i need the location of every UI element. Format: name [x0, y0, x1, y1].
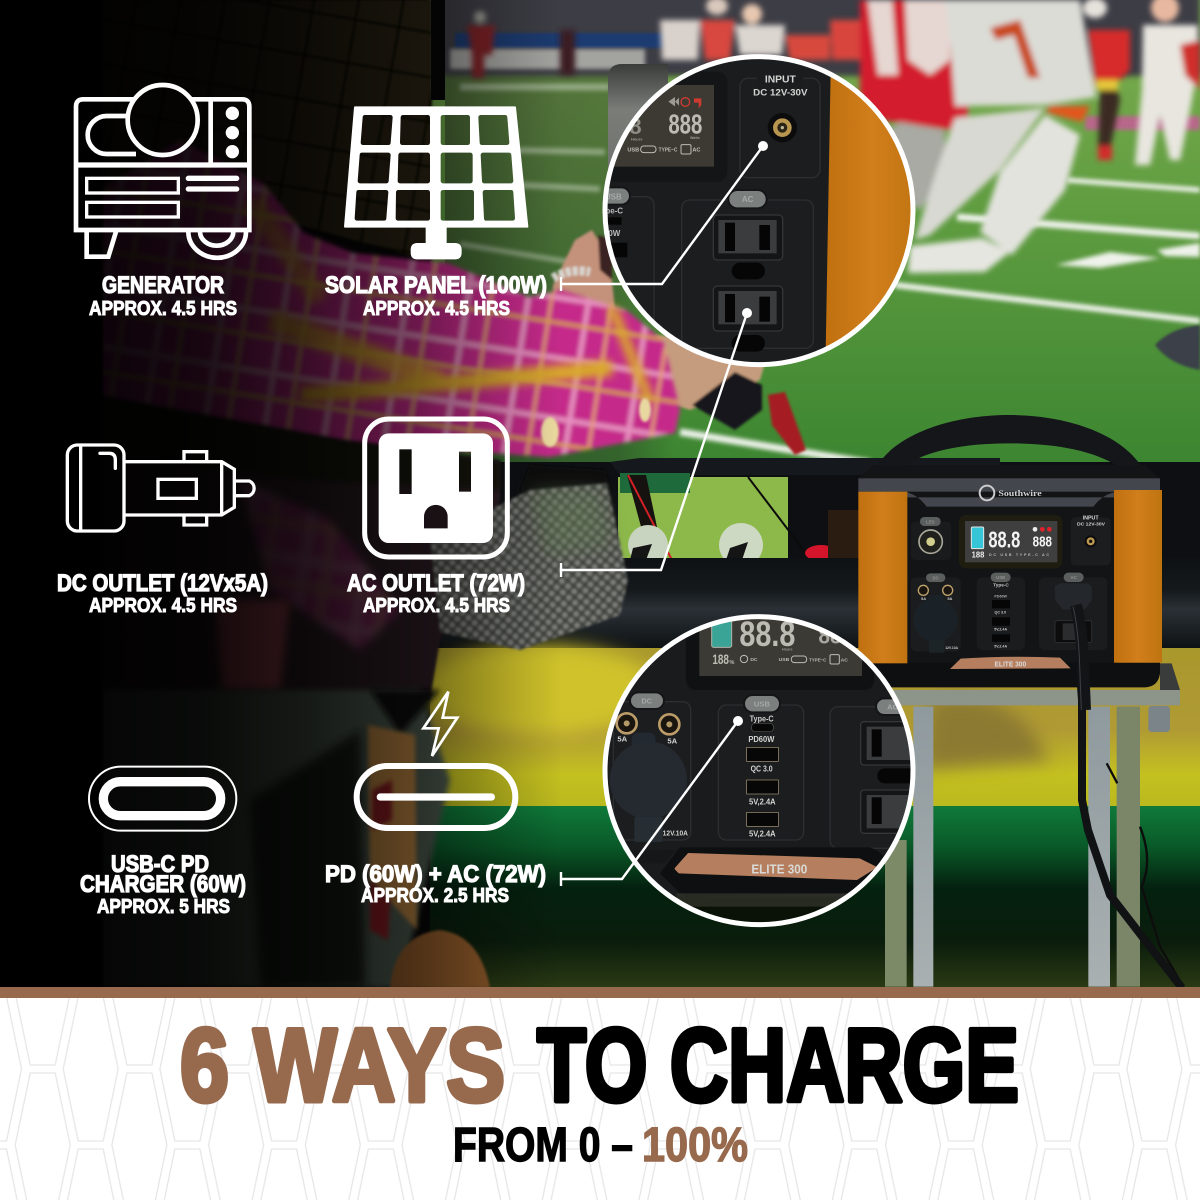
LCD display: 888 — [1033, 534, 1052, 550]
input port module: INPUT — [1083, 515, 1099, 521]
icon: generator — [76, 85, 249, 258]
distant players — [467, 0, 1200, 165]
input port close-up: INPUT — [765, 75, 797, 86]
USB ports close-up: pe-C — [605, 206, 623, 215]
logo: Southwire — [998, 489, 1042, 498]
carry handle — [877, 415, 1142, 467]
DC outlet module: 5A — [921, 596, 926, 601]
label: PD + AC: APPROX. 2.5 HRS — [361, 885, 509, 907]
AC outlets close-up — [682, 190, 813, 352]
portable power station: Southwire Elite 300 — [858, 415, 1162, 710]
label: generator — [89, 272, 237, 320]
LCD display close-up: USB — [627, 147, 639, 153]
LCD display close-up — [686, 619, 874, 690]
LCD display close-up: % — [729, 660, 734, 666]
tailgate pole — [431, 0, 445, 100]
label: DC outlet: DC OUTLET (12Vx5A) — [57, 570, 268, 597]
title: TO CHARGE — [537, 1008, 1019, 1124]
LCD display close-up: 8 — [629, 114, 642, 139]
input port module — [1071, 515, 1111, 565]
bottom housing and lawn — [660, 847, 884, 922]
connector line: PD + AC — [561, 716, 743, 886]
LCD display close-up: TYPE−C — [659, 147, 677, 153]
LCD display close-up: USB — [779, 657, 790, 663]
LCD display close-up: AC — [841, 657, 848, 663]
label: solar panel: APPROX. 4.5 HRS — [363, 298, 510, 320]
blurred football players — [467, 0, 1200, 273]
LCD display close-up: 188 — [712, 651, 729, 667]
orange side panels — [858, 492, 907, 663]
label: PD + AC: PD (60W) + AC (72W) — [325, 861, 546, 888]
logo — [980, 486, 1042, 500]
person: plaid upper — [256, 0, 434, 262]
USB ports close-up: 5V,2.4A — [749, 797, 776, 806]
USB module: 5V,2.4A — [994, 628, 1007, 632]
LCD display close-up: DC — [750, 657, 758, 663]
label: generator: APPROX. 4.5 HRS — [89, 298, 237, 320]
label: generator: GENERATOR — [102, 272, 224, 299]
title — [180, 1008, 1019, 1124]
ELITE 300 nameplate — [950, 657, 1071, 669]
dark equipment at field edge — [1155, 325, 1200, 370]
LCD display close-up: 88.8 — [739, 615, 795, 654]
LCD display: 88.8 — [988, 526, 1020, 552]
player number 7 — [945, 0, 1096, 106]
label: USB-C PD charger: APPROX. 5 HRS — [97, 896, 230, 918]
footer band — [0, 987, 1200, 1200]
label: DC outlet: APPROX. 4.5 HRS — [89, 595, 237, 617]
label: solar panel — [325, 272, 547, 320]
LCD display close-up: 88 — [818, 622, 842, 648]
title: 6 WAYS — [180, 1008, 505, 1124]
label: DC outlet — [57, 570, 268, 617]
subtitle: 100% — [642, 1119, 748, 1172]
label: PD + AC — [325, 861, 546, 907]
DC ports close-up: DC — [641, 697, 653, 706]
person: lower shirt and trousers — [100, 395, 500, 988]
magnified callout: USB and DC ports — [602, 614, 916, 928]
orange side panel — [826, 77, 910, 347]
input port close-up — [740, 75, 820, 178]
person: hand and forearm — [553, 230, 770, 430]
label: AC outlet: AC OUTLET (72W) — [347, 570, 525, 597]
icon: lightning bolt — [423, 692, 457, 756]
DC ports close-up: 5A — [667, 736, 678, 745]
input port close-up: DC 12V-30V — [753, 87, 807, 97]
USB module — [977, 573, 1025, 650]
LCD display close-up: Hours — [631, 137, 643, 142]
callout ring — [605, 57, 913, 365]
icon: solar panel — [345, 107, 527, 258]
label: USB-C PD charger: CHARGER (60W) — [80, 871, 246, 898]
top housing — [858, 465, 1159, 493]
USB module: Type-C — [993, 582, 1009, 587]
LCD display close-up: Watts — [690, 136, 700, 140]
football field — [430, 0, 1200, 480]
LCD display close-up — [614, 72, 727, 180]
USB ports close-up: PD60W — [748, 735, 775, 744]
dark lawn — [430, 806, 1200, 988]
USB ports close-up: Type-C — [750, 713, 774, 723]
red shoe on field — [768, 392, 806, 455]
LCD display close-up: 888 — [668, 108, 702, 139]
USB ports close-up: USB — [754, 700, 771, 709]
LCD display — [959, 515, 1062, 568]
USB module: USB — [996, 575, 1005, 580]
AC module with plug: AC — [1071, 575, 1077, 580]
LCD display: 188 — [972, 550, 985, 559]
bottom housing — [860, 663, 1160, 687]
DC outlet module: 5A — [947, 596, 953, 601]
connector line: solar panel — [561, 141, 768, 291]
DC outlet module: 12V.10A — [945, 645, 958, 650]
label: AC outlet: APPROX. 4.5 HRS — [363, 595, 510, 617]
folding table — [885, 663, 1183, 987]
label: USB-C PD charger: USB-C PD — [111, 851, 209, 878]
player number 10 — [860, 0, 972, 130]
subtitle: FROM 0 – — [453, 1119, 633, 1172]
person: pink shirt — [100, 140, 680, 457]
USB ports close-up: USB — [605, 192, 622, 201]
LCD display close-up: Hours — [782, 648, 793, 652]
AC outlets close-up — [830, 699, 910, 849]
AC module with plug — [1039, 573, 1107, 710]
label: AC outlet — [347, 570, 525, 617]
front panel — [903, 492, 1117, 665]
callout ring — [605, 617, 913, 925]
DC outlet module: DC — [933, 575, 939, 580]
USB ports close-up: 5V,2.4A — [749, 829, 776, 838]
LCD display close-up: TYPE−C — [809, 657, 827, 663]
icon: USB-C port — [89, 767, 236, 831]
AC outlets close-up: AC — [742, 195, 754, 204]
handheld gray device — [608, 64, 668, 170]
ELITE 300 nameplate close-up — [676, 854, 875, 879]
DC outlet module — [911, 573, 961, 653]
LED module: LED — [926, 519, 935, 524]
knit sock — [430, 465, 628, 650]
USB module: QC 3.0 — [995, 610, 1006, 614]
USB ports close-up — [608, 187, 654, 320]
LCD display close-up: AC — [692, 148, 701, 154]
ELITE 300 nameplate close-up: ELITE 300 — [751, 862, 807, 876]
magnified callout: DC input and AC ports — [583, 50, 920, 370]
icon: DC car charger — [67, 445, 254, 531]
LCD display: DC USB TYPE-C AC — [989, 553, 1049, 557]
LED module — [911, 517, 951, 560]
icon: USB-C with lightning — [357, 692, 515, 828]
ELITE 300 nameplate: ELITE 300 — [994, 659, 1026, 668]
label: solar panel: SOLAR PANEL (100W) — [325, 272, 547, 299]
input port module: DC 12V-30V — [1077, 522, 1106, 528]
USB module: 5V,2.4A — [994, 644, 1007, 648]
dark overlay — [94, 0, 548, 987]
DC ports close-up: 5A — [617, 734, 628, 743]
label: USB-C PD charger — [80, 851, 246, 918]
truck tailgate interior — [499, 458, 1200, 558]
DC ports close-up: 12V.10A — [663, 830, 688, 837]
tailgate rail — [400, 558, 1200, 650]
USB module: PD60W — [994, 594, 1008, 598]
yellow background foliage — [420, 645, 1200, 810]
power cable — [1077, 687, 1185, 987]
AC outlets close-up: AC — [887, 703, 899, 712]
USB ports close-up — [718, 695, 804, 840]
icon: AC wall outlet — [365, 419, 507, 557]
DC ports close-up — [610, 692, 691, 842]
USB ports close-up: 0W — [608, 229, 621, 238]
USB ports close-up: QC 3.0 — [751, 764, 773, 773]
connector line: AC outlet — [561, 308, 752, 577]
